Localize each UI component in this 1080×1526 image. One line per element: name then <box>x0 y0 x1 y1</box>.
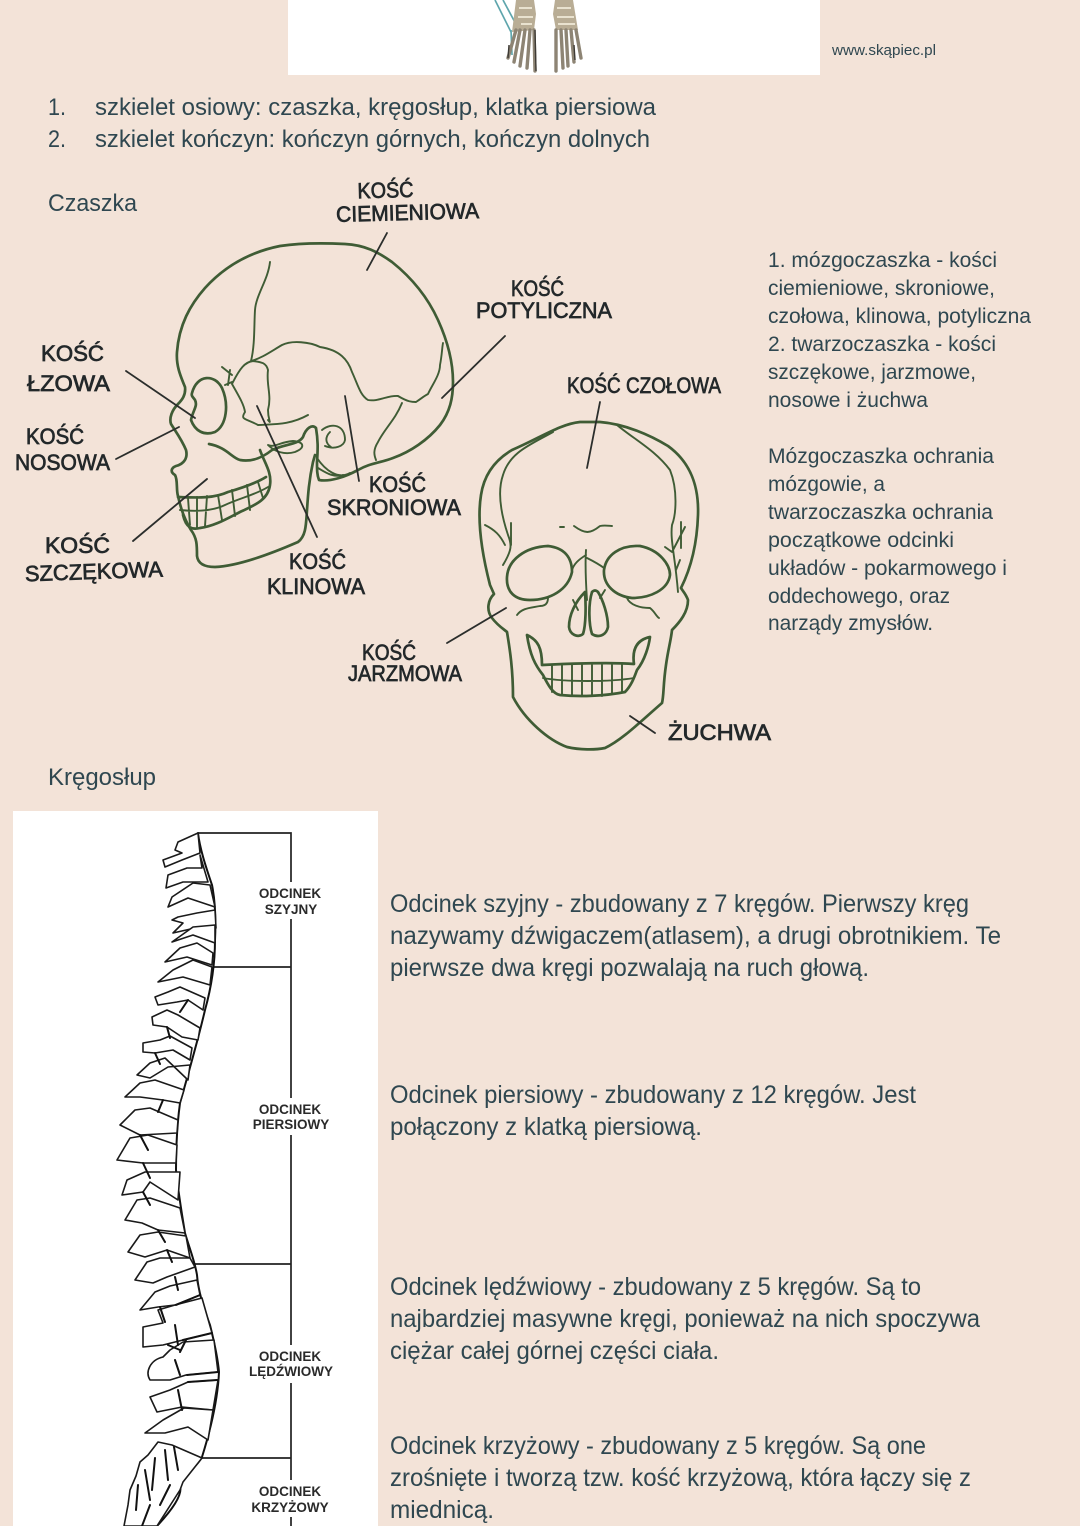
eye sockets <box>507 546 572 600</box>
text block: odcinek szyjny <box>390 890 1001 982</box>
text block: skull description: szczękowe, jarzmowe, <box>768 360 976 384</box>
spine section brackets <box>195 833 291 1526</box>
hand-written label: kość skroniowa <box>327 472 461 520</box>
jaw inner <box>527 635 650 696</box>
text block: odcinek szyjny: Odcinek szyjny - zbudowany z 7 kręgów. Pierwszy kręg <box>390 890 969 918</box>
label: odcinek krzyżowy <box>251 1484 329 1515</box>
hand-written label: kość potyliczna <box>476 276 612 323</box>
label: odcinek krzyżowy: KRZYŻOWY <box>251 1500 329 1515</box>
label: odcinek szyjny: ODCINEK <box>259 886 321 901</box>
label: odcinek piersiowy: ODCINEK <box>259 1102 321 1117</box>
label: odcinek szyjny: SZYJNY <box>265 902 317 917</box>
text block: skull description: 2. twarzoczaszka - kości <box>768 332 996 356</box>
label: odcinek lędźwiowy: LĘDŹWIOWY <box>249 1364 333 1379</box>
hand-written label: kość potyliczna: KOŚĆ <box>511 276 564 301</box>
hand-written label: kość skroniowa: SKRONIOWA <box>327 495 461 520</box>
text block: odcinek krzyżowy: zrośnięte i tworzą tzw. kość krzyżową, która łączy się z <box>390 1464 971 1492</box>
text block: odcinek piersiowy: połączony z klatką piersiową. <box>390 1113 702 1141</box>
skull outline <box>170 243 453 567</box>
eye socket <box>191 378 226 433</box>
hand-written label: kość szczękowa: KOŚĆ <box>45 533 110 558</box>
text block: odcinek lędźwiowy <box>390 1273 980 1365</box>
label: odcinek krzyżowy: ODCINEK <box>259 1484 321 1499</box>
text block: odcinek krzyżowy: miednicą. <box>390 1496 494 1524</box>
text block: skull description: ciemieniowe, skroniowe, <box>768 276 995 300</box>
text block: odcinek krzyżowy: Odcinek krzyżowy - zbudowany z 5 kręgów. Są one <box>390 1432 926 1460</box>
hand-written label: kość nosowa: NOSOWA <box>15 450 110 475</box>
nose <box>569 590 608 636</box>
text block: odcinek szyjny: pierwsze dwa kręgi pozwalają na ruch głową. <box>390 954 869 982</box>
hand-written label: kość łzowa <box>27 341 110 396</box>
pointer lines <box>116 233 505 541</box>
sutures <box>251 262 443 460</box>
text block: odcinek lędźwiowy: ciężar całej górnej części ciała. <box>390 1337 719 1365</box>
sutures and forehead details <box>485 425 685 618</box>
label: odcinek szyjny <box>259 886 321 917</box>
text block: skull description: twarzoczaszka ochrania <box>768 500 993 524</box>
vertebrae <box>117 833 219 1526</box>
text block: odcinek lędźwiowy: najbardziej masywne kręgi, ponieważ na nich spoczywa <box>390 1305 980 1333</box>
text block: odcinek piersiowy <box>390 1081 916 1141</box>
sacrum <box>124 1442 202 1526</box>
hand-written label: kość skroniowa: KOŚĆ <box>369 472 426 497</box>
numbered list: skeleton divisions <box>48 94 657 153</box>
label: odcinek lędźwiowy <box>249 1349 333 1379</box>
pointer lines <box>587 402 600 468</box>
skull outline <box>479 422 698 749</box>
text block: skull description: 1. mózgoczaszka - kości <box>768 248 997 272</box>
text block: skull description: Mózgoczaszka ochrania <box>768 444 994 468</box>
text block: skull description: układów - pokarmowego i <box>768 556 1007 580</box>
label: odcinek lędźwiowy: ODCINEK <box>259 1349 321 1364</box>
upper teeth and jaw <box>178 450 270 529</box>
text block: odcinek lędźwiowy: Odcinek lędźwiowy - zbudowany z 5 kręgów. Są to <box>390 1273 921 1301</box>
heading: Kręgosłup: Kręgosłup <box>48 764 156 791</box>
diagram: front view skull <box>447 402 698 749</box>
label: odcinek piersiowy: PIERSIOWY <box>253 1117 329 1132</box>
numbered list: skeleton divisions: 2. <box>48 126 66 153</box>
text block: skull description: mózgowie, a <box>768 472 885 496</box>
text block: odcinek krzyżowy <box>390 1432 971 1524</box>
hand-written label: kość jarzmowa: JARZMOWA <box>348 661 462 686</box>
hand-written label: kość potyliczna: POTYLICZNA <box>476 298 612 323</box>
hand-written label: kość czołowa: KOŚĆ CZOŁOWA <box>567 373 721 398</box>
numbered list: skeleton divisions: szkielet kończyn: kończyn górnych, kończyn dolnych <box>95 126 650 153</box>
text block: odcinek szyjny: nazywamy dźwigaczem(atlasem), a drugi obrotnikiem. Te <box>390 922 1001 950</box>
hand-written label: kość klinowa: KLINOWA <box>267 574 365 599</box>
hand-written label: kość łzowa: KOŚĆ <box>41 341 104 366</box>
text block: skull description <box>768 248 1031 635</box>
hand-written label: kość szczękowa: SZCZĘKOWA <box>24 557 164 586</box>
hand-written label: kość nosowa: KOŚĆ <box>26 424 84 449</box>
text block: skull description: czołowa, klinowa, potyliczna <box>768 304 1031 328</box>
hand-written label: żuchwa: ŻUCHWA <box>668 720 771 745</box>
hand-written label: kość szczękowa <box>24 533 164 586</box>
label: odcinek piersiowy <box>253 1102 329 1132</box>
panel: feet illustration <box>288 0 820 75</box>
heading: Czaszka: Czaszka <box>48 190 138 217</box>
hand-written label: kość klinowa <box>267 549 365 599</box>
website credit: www.skąpiec.pl <box>831 42 936 59</box>
text block: skull description: nosowe i żuchwa <box>768 388 928 412</box>
hand-written label: kość klinowa: KOŚĆ <box>289 549 346 574</box>
hand-written label: kość nosowa <box>15 424 110 475</box>
hand-written label: kość ciemieniowa: CIEMIENIOWA <box>336 198 480 227</box>
numbered list: skeleton divisions: 1. <box>48 94 66 121</box>
text block: skull description: oddechowego, oraz <box>768 584 950 608</box>
hand-written label: kość łzowa: ŁZOWA <box>27 371 110 396</box>
text block: skull description: narządy zmysłów. <box>768 611 933 635</box>
text block: odcinek piersiowy: Odcinek piersiowy - zbudowany z 12 kręgów. Jest <box>390 1081 916 1109</box>
hand-written label: kość ciemieniowa: KOŚĆ <box>357 177 414 203</box>
panel: spine diagram <box>13 811 378 1526</box>
hand-written label: kość ciemieniowa <box>335 175 480 227</box>
text block: skull description: początkowe odcinki <box>768 528 954 552</box>
numbered list: skeleton divisions: szkielet osiowy: czaszka, kręgosłup, klatka piersiowa <box>95 94 657 121</box>
hand-written label: kość jarzmowa: KOŚĆ <box>362 640 416 665</box>
hand-written label: kość jarzmowa <box>348 640 462 686</box>
diagram: side view skull <box>116 233 505 567</box>
